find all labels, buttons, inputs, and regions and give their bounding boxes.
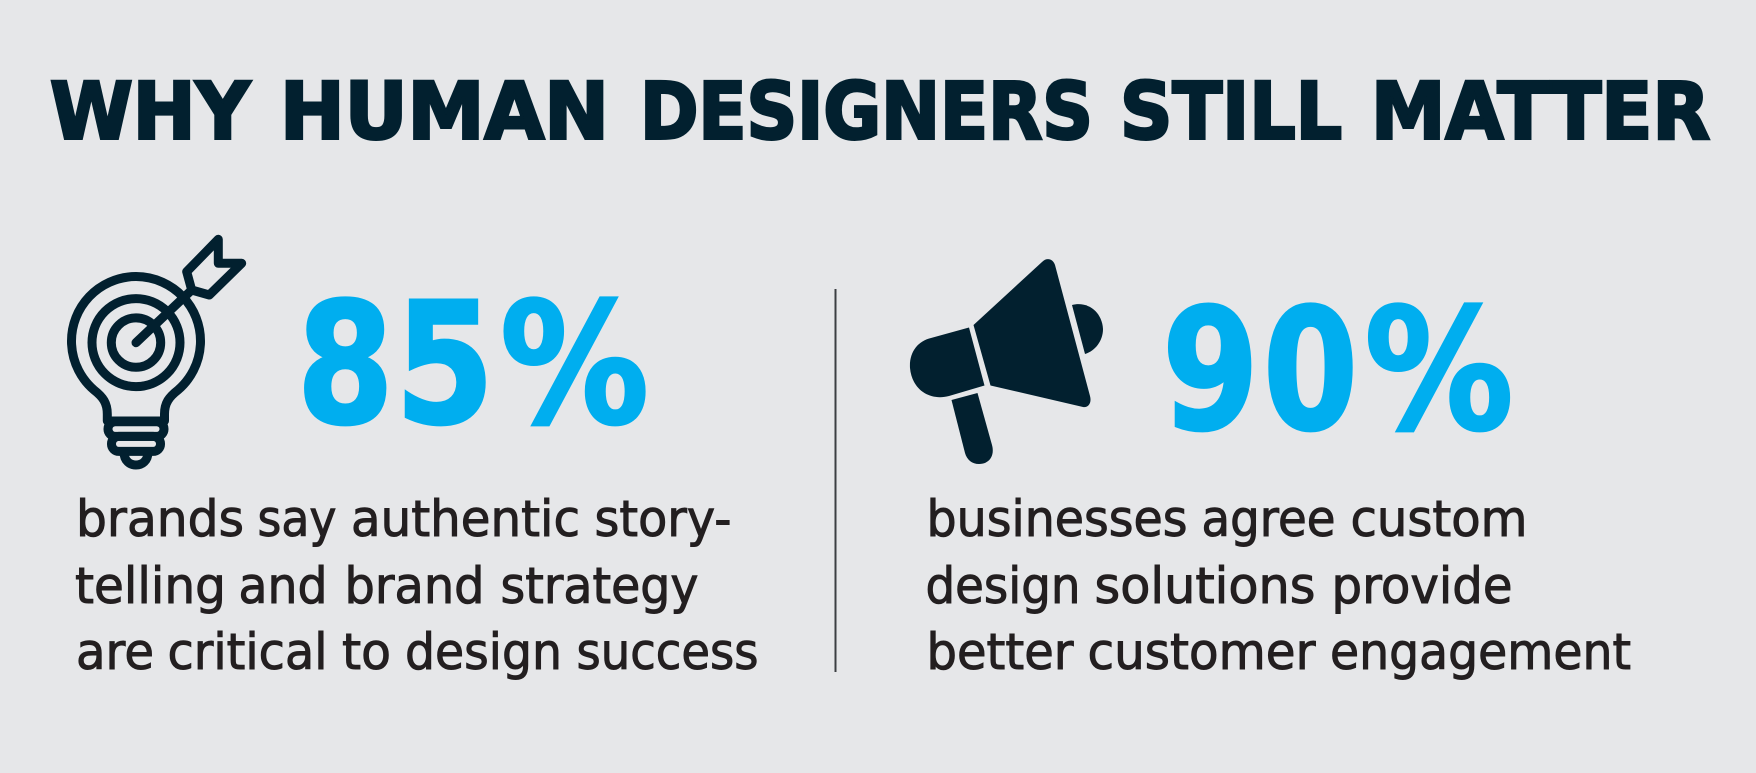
icon: megaphone: [910, 259, 1103, 464]
icon: light bulb with target and arrow: [71, 239, 242, 465]
text block: 85% description: success: [576, 623, 758, 681]
text block: 85% description: are: [76, 623, 154, 681]
text block: 85% description: design: [405, 623, 562, 681]
text block: 90% description: design: [926, 557, 1080, 615]
text block: 90% description: customer: [1088, 623, 1316, 681]
panel: 90% businesses: [910, 259, 1631, 681]
stat: 85%: %: [500, 266, 649, 462]
stat: 90%: 9: [1162, 272, 1259, 468]
text block: 85% description: strategy: [500, 557, 698, 615]
title: STILL: [1120, 68, 1342, 158]
text block: 90% description: solutions: [1094, 557, 1316, 615]
text block: 85% description: and: [238, 557, 328, 615]
panel: 85% brands: [71, 239, 758, 681]
text block: 90% description: agree: [1202, 490, 1336, 548]
stat: 90%: %: [1364, 272, 1514, 468]
text block: 90% description: custom: [1350, 490, 1528, 548]
text block: 85% description: story-: [594, 490, 732, 548]
title: MATTER: [1371, 68, 1710, 158]
stat: 90%: [1162, 272, 1514, 468]
text block: 85% description: brands: [76, 490, 244, 548]
text block: 85% description: critical: [168, 623, 328, 681]
stat: 85%: [297, 266, 649, 462]
title: HUMAN: [280, 68, 609, 158]
title: WHY: [50, 68, 251, 158]
text block: 90% description: businesses: [926, 490, 1188, 548]
text block: 90% description: provide: [1332, 557, 1512, 615]
title: [50, 68, 1710, 158]
text block: 85% description: [75, 490, 758, 681]
text block: 85% description: to: [342, 623, 391, 681]
text block: 85% description: authentic: [351, 490, 580, 548]
stat: 85%: 8: [297, 266, 394, 462]
text block: 85% description: brand: [344, 557, 484, 615]
stat: 90%: 0: [1263, 272, 1358, 468]
text block: 90% description: better: [926, 623, 1074, 681]
text block: 90% description: engagement: [1330, 623, 1631, 681]
stat: 85%: 5: [395, 266, 494, 462]
text block: 85% description: telling: [75, 557, 226, 615]
title: DESIGNERS: [640, 68, 1093, 158]
text block: 85% description: say: [258, 490, 336, 548]
text block: 90% description: [926, 490, 1631, 681]
